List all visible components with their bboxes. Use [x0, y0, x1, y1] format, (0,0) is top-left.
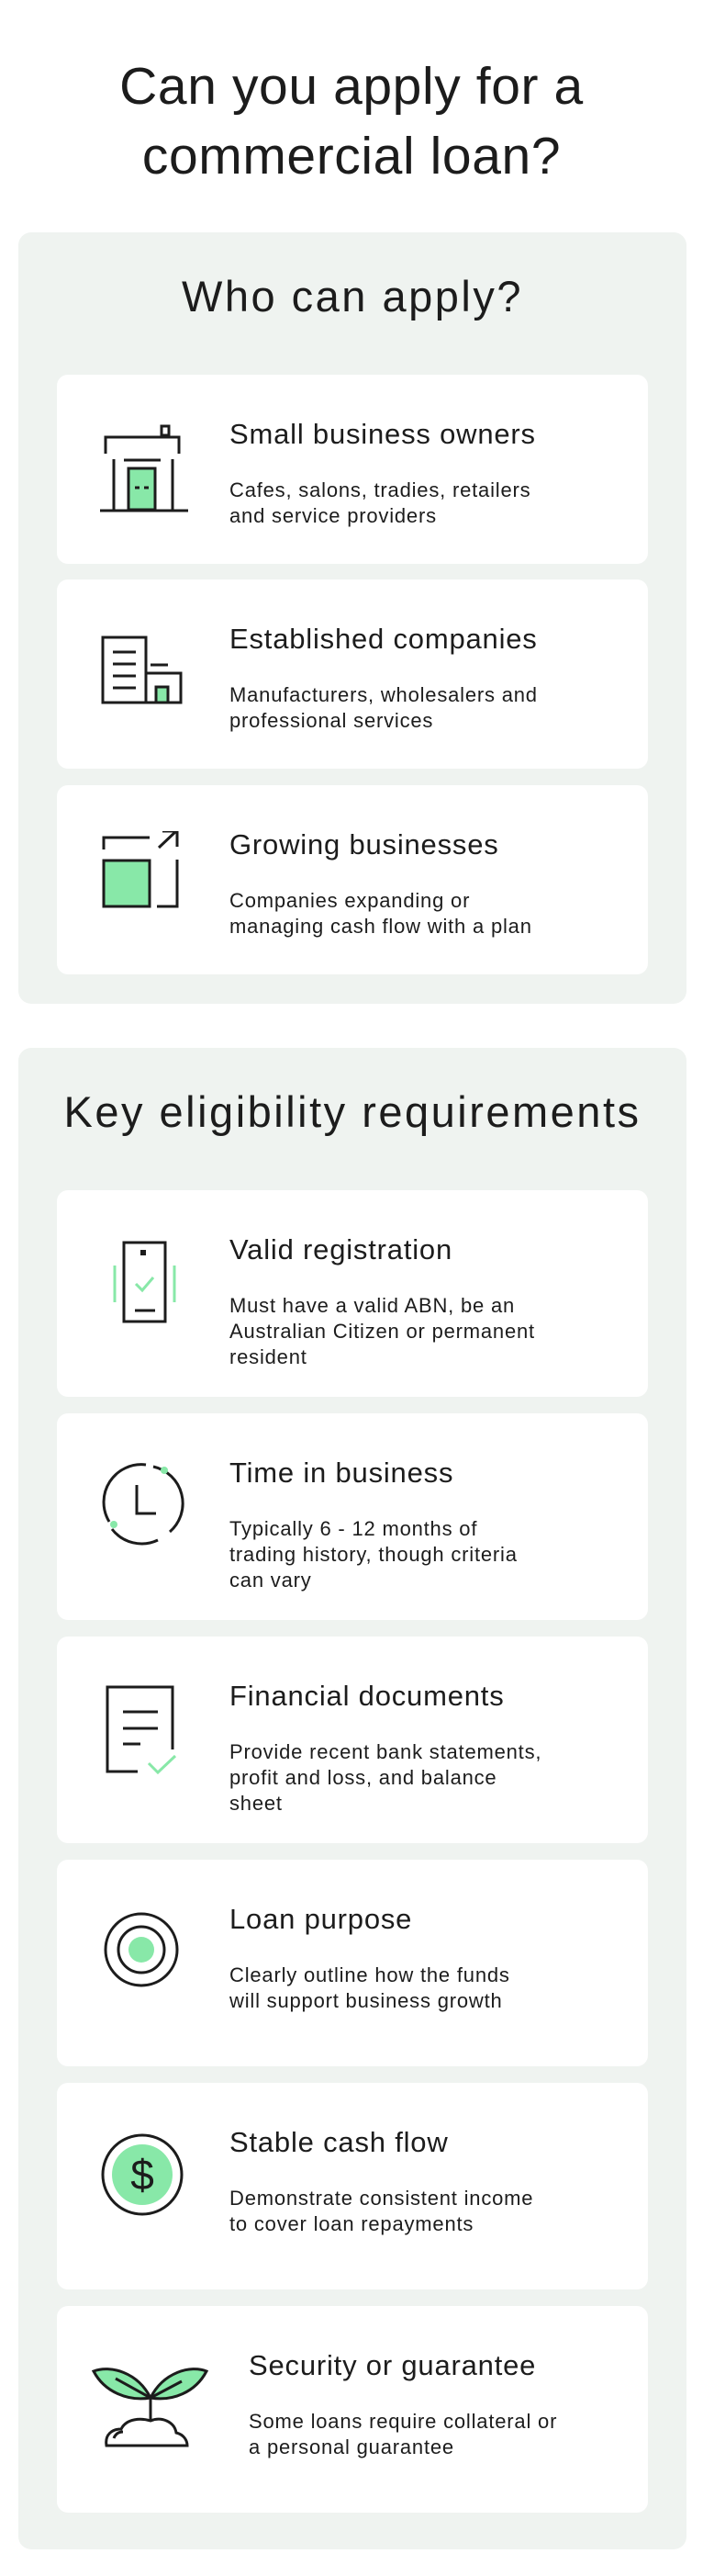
card: loan purpose	[57, 1860, 648, 2066]
heading: Small business owners	[229, 418, 536, 450]
body text: Provide recent bank statements,	[229, 1740, 541, 1763]
body text: Australian Citizen or permanent	[229, 1320, 535, 1343]
heading: key eligibility requirements: Key eligibility requirements	[63, 1087, 642, 1136]
body text: Typically 6 - 12 months of	[229, 1517, 477, 1540]
heading: Growing businesses	[229, 828, 499, 861]
body text	[229, 889, 532, 938]
body text	[229, 1963, 510, 2012]
card: financial documents	[57, 1637, 648, 1843]
body text: professional services	[229, 709, 433, 732]
card: stable cash flow	[57, 2083, 648, 2289]
body text: to cover loan repayments	[229, 2212, 474, 2235]
card: small business owners	[57, 375, 648, 564]
body text	[229, 478, 530, 527]
body text: can vary	[229, 1569, 312, 1592]
body text	[229, 2187, 533, 2235]
icon: plant	[92, 2368, 208, 2447]
card: time in business	[57, 1413, 648, 1620]
body text: managing cash flow with a plan	[229, 915, 532, 938]
heading: Established companies	[229, 623, 538, 655]
body text: Some loans require collateral or	[249, 2410, 557, 2433]
icon: dollar coin: $	[130, 2151, 154, 2199]
body text: sheet	[229, 1792, 283, 1815]
heading: Stable cash flow	[229, 2126, 449, 2158]
heading: Security or guarantee	[249, 2349, 536, 2381]
body text: profit and loss, and balance	[229, 1766, 497, 1789]
body text: Companies expanding or	[229, 889, 470, 912]
icon: document	[106, 1686, 176, 1774]
body text: Clearly outline how the funds	[229, 1963, 510, 1986]
icon: dollar coin	[101, 2134, 184, 2215]
icon: storefront	[100, 424, 188, 512]
icon: expand square	[103, 831, 178, 907]
icon: phone check	[114, 1242, 176, 1322]
body text: a personal guarantee	[249, 2435, 454, 2458]
card: valid registration	[57, 1190, 648, 1397]
card: growing businesses	[57, 785, 648, 974]
body text	[229, 1517, 518, 1592]
heading: Time in business	[229, 1457, 453, 1489]
title	[119, 57, 584, 186]
icon: target	[105, 1912, 178, 1987]
body text: Manufacturers, wholesalers and	[229, 683, 538, 706]
body text: trading history, though criteria	[229, 1543, 518, 1566]
body text	[229, 1294, 535, 1368]
body text: will support business growth	[229, 1989, 503, 2012]
heading: Financial documents	[229, 1680, 505, 1712]
heading: who can apply: Who can apply?	[182, 272, 523, 321]
body text	[249, 2410, 557, 2458]
title: commercial loan?	[142, 127, 561, 186]
body text: Cafes, salons, tradies, retailers	[229, 478, 530, 501]
body text	[229, 683, 538, 732]
title: Can you apply for a	[119, 57, 584, 116]
heading: Valid registration	[229, 1233, 452, 1266]
body text: resident	[229, 1345, 307, 1368]
icon: clock	[103, 1463, 184, 1545]
icon: buildings	[101, 636, 182, 703]
card: established companies	[57, 579, 648, 769]
card: security or guarantee	[57, 2306, 648, 2513]
body text: Must have a valid ABN, be an	[229, 1294, 515, 1317]
panel: key eligibility requirements	[18, 1048, 686, 2549]
body text: and service providers	[229, 504, 437, 527]
panel: who can apply	[18, 232, 686, 1004]
heading: Loan purpose	[229, 1903, 412, 1935]
body text: Demonstrate consistent income	[229, 2187, 533, 2210]
body text	[229, 1740, 541, 1815]
